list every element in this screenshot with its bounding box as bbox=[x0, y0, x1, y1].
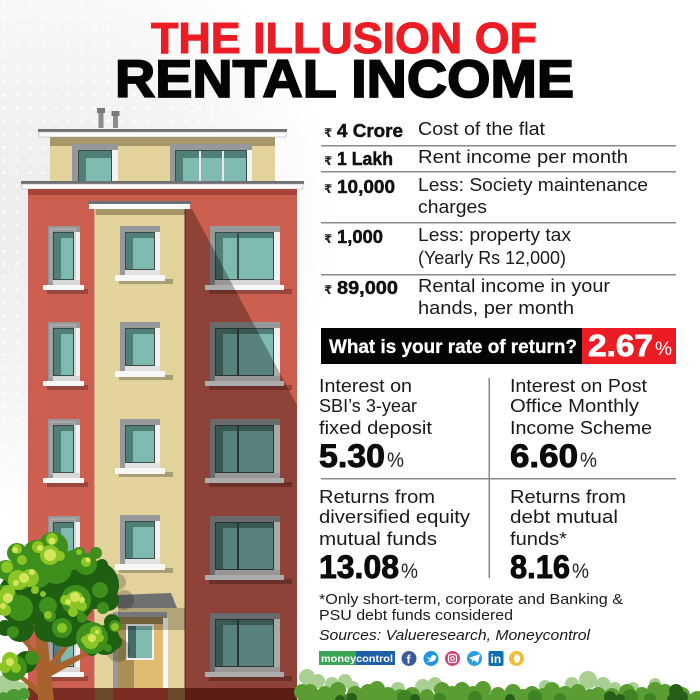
row: rental income in hand: 89,000 bbox=[337, 278, 398, 298]
equity mutual funds: diversified equity bbox=[319, 507, 470, 527]
equity mutual funds bbox=[319, 487, 470, 585]
row: rental income in hand: ₹ bbox=[324, 283, 332, 297]
back bush bbox=[0, 673, 30, 700]
icon: twitter bbox=[424, 651, 438, 666]
main walls bbox=[28, 189, 297, 700]
row: cost of the flat: Cost of the flat bbox=[418, 119, 545, 139]
Post Office MIS: 6.60 bbox=[510, 438, 578, 474]
illustration: apartment building bbox=[21, 108, 304, 700]
door canopy bbox=[118, 593, 185, 630]
debt mutual funds: funds* bbox=[510, 529, 567, 549]
callout: rate of return: % bbox=[655, 339, 672, 360]
row: property tax: 1,000 bbox=[337, 227, 383, 247]
row: cost of the flat: 4 Crore bbox=[337, 121, 403, 141]
penthouse wall bbox=[50, 137, 275, 182]
centre cornice bbox=[88, 201, 191, 209]
penthouse window left bbox=[72, 144, 118, 182]
row: rental income in hand: Rental income in your bbox=[418, 276, 610, 296]
equity mutual funds: % bbox=[401, 560, 418, 583]
SBI fixed deposit bbox=[319, 376, 432, 474]
row: society maintenance: charges bbox=[418, 197, 487, 217]
windows: right column bbox=[205, 226, 292, 681]
trunk and branches bbox=[16, 620, 90, 700]
SBI fixed deposit: Interest on bbox=[319, 376, 412, 396]
Post Office MIS: Interest on Post bbox=[510, 376, 647, 396]
row: cost of the flat bbox=[324, 119, 545, 141]
entrance door bbox=[113, 612, 168, 700]
table: rental income figures bbox=[321, 119, 676, 318]
row: rent income: ₹ bbox=[324, 154, 332, 168]
top roof bbox=[38, 129, 287, 137]
icon: instagram bbox=[445, 651, 460, 666]
equity mutual funds: 13.08 bbox=[319, 549, 399, 585]
Post Office MIS: % bbox=[580, 449, 597, 472]
base band bbox=[28, 688, 297, 700]
row: rent income: 1 Lakh bbox=[337, 149, 393, 169]
title bbox=[115, 14, 574, 109]
canopy light bbox=[0, 533, 119, 649]
row: rental income in hand bbox=[324, 276, 610, 318]
debt mutual funds bbox=[510, 487, 626, 585]
SBI fixed deposit: SBI’s 3-year bbox=[319, 396, 417, 416]
title: RENTAL INCOME bbox=[115, 50, 574, 109]
lower branch foliage bbox=[0, 651, 39, 681]
tree shadow on wall bbox=[106, 574, 134, 662]
row: property tax: ₹ bbox=[324, 232, 332, 246]
penthouse window right bbox=[170, 144, 252, 182]
Post Office MIS: Income Scheme bbox=[510, 418, 652, 438]
logo: moneycontrol: moneycontrol bbox=[321, 653, 393, 665]
row: society maintenance bbox=[324, 175, 648, 217]
callout: rate of return: What is your rate of return? bbox=[329, 337, 577, 358]
row: society maintenance: 10,000 bbox=[337, 177, 395, 197]
SBI fixed deposit: fixed deposit bbox=[319, 418, 432, 438]
row: rent income: Rent income per month bbox=[418, 147, 628, 167]
footnote bbox=[319, 591, 623, 624]
cast shadow on right wall bbox=[185, 209, 297, 700]
row: society maintenance: Less: Society maintenance bbox=[418, 175, 648, 195]
icon: telegram bbox=[467, 651, 482, 666]
equity mutual funds: mutual funds bbox=[319, 529, 437, 549]
row: society maintenance: ₹ bbox=[324, 182, 332, 196]
windows: centre column bbox=[115, 226, 173, 573]
equity mutual funds: Returns from bbox=[319, 487, 435, 507]
row: property tax bbox=[324, 225, 571, 268]
Post Office MIS: Office Monthly bbox=[510, 396, 639, 416]
icon: facebook: f bbox=[406, 652, 412, 666]
footnote: *Only short-term, corporate and Banking & bbox=[319, 591, 623, 608]
row: rent income bbox=[324, 147, 628, 169]
footnote: PSU debt funds considered bbox=[319, 607, 513, 624]
main roof bbox=[21, 181, 304, 189]
row: property tax: (Yearly Rs 12,000) bbox=[418, 248, 566, 268]
windows: left column bbox=[43, 226, 88, 681]
row: property tax: Less: property tax bbox=[418, 225, 571, 245]
debt mutual funds: 8.16 bbox=[510, 549, 570, 585]
illustration: tree bbox=[0, 532, 122, 700]
title: THE ILLUSION OF bbox=[151, 14, 537, 63]
canopy dark bbox=[0, 552, 122, 656]
debt mutual funds: % bbox=[572, 560, 589, 583]
foliage: bottom hedge bbox=[294, 669, 700, 700]
SBI fixed deposit: % bbox=[387, 449, 404, 472]
SBI fixed deposit: 5.30 bbox=[319, 438, 385, 474]
icon: linkedin: in bbox=[490, 652, 501, 666]
Post Office MIS bbox=[510, 376, 652, 474]
callout: rate of return bbox=[321, 328, 676, 364]
row: rental income in hand: hands, per month bbox=[418, 298, 574, 318]
canopy highlights bbox=[0, 538, 99, 642]
comparison grid bbox=[319, 376, 676, 585]
roof vents bbox=[97, 108, 120, 128]
debt mutual funds: debt mutual bbox=[510, 507, 618, 527]
row: cost of the flat: ₹ bbox=[324, 126, 332, 140]
sources: Sources: Valueresearch, Moneycontrol bbox=[319, 627, 591, 644]
canopy mid bbox=[0, 532, 121, 654]
icon: koo bbox=[509, 651, 524, 666]
debt mutual funds: Returns from bbox=[510, 487, 626, 507]
callout: rate of return: 2.67 bbox=[588, 328, 653, 363]
social icons bbox=[402, 651, 524, 666]
